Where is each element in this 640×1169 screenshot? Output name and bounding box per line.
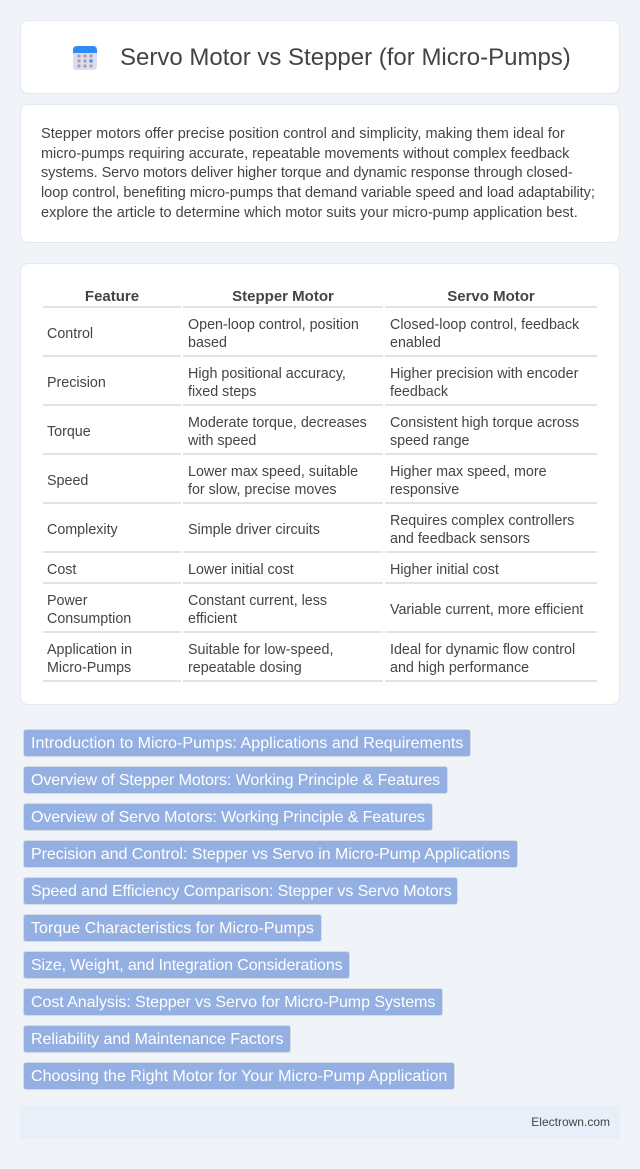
row: torque	[47, 415, 579, 449]
intro panel	[20, 104, 620, 243]
link 3: Overview of Servo Motors: Working Principle & Features	[31, 809, 425, 826]
row: application: and high performance	[390, 660, 529, 676]
link 9	[23, 1025, 291, 1053]
topic links list	[23, 729, 518, 1090]
row: application: Ideal for dynamic flow control	[390, 642, 575, 658]
row: control: Closed-loop control, feedback	[390, 317, 579, 333]
link 4	[23, 840, 518, 868]
row: power consumption: efficient	[188, 611, 237, 627]
footer bar	[20, 1105, 620, 1139]
row: cost: Lower initial cost	[188, 562, 294, 578]
row: power consumption: Constant current, less	[188, 593, 327, 609]
column headers	[85, 288, 535, 305]
intro text: micro-pumps requiring accurate, repeatable movements without complex feedback	[41, 146, 569, 162]
link 8	[23, 988, 443, 1016]
link 7	[23, 951, 350, 979]
column headers: Feature	[85, 288, 139, 305]
row: complexity: Simple driver circuits	[188, 522, 320, 538]
row: torque: with speed	[188, 433, 256, 449]
row: speed	[47, 464, 547, 498]
link 6	[23, 914, 322, 942]
intro text: explore the article to determine which motor suits your micro-pump application best.	[41, 205, 578, 221]
row: application: Micro-Pumps	[47, 660, 131, 676]
row: speed: responsive	[390, 482, 459, 498]
link 2	[23, 766, 448, 794]
row: speed: Higher max speed, more	[390, 464, 547, 480]
title: Servo Motor vs Stepper (for Micro-Pumps)	[120, 44, 571, 71]
row: power consumption: Power	[47, 593, 88, 609]
row: speed: for slow, precise moves	[188, 482, 337, 498]
row: torque: Moderate torque, decreases	[188, 415, 367, 431]
link 5: Speed and Efficiency Comparison: Stepper vs Servo Motors	[31, 883, 452, 900]
row: complexity: Requires complex controllers	[390, 513, 574, 529]
row: precision	[47, 366, 578, 400]
icon: calendar	[73, 46, 97, 70]
column headers: Stepper Motor	[232, 288, 334, 305]
row: precision: High positional accuracy,	[188, 366, 346, 382]
row: torque: speed range	[390, 433, 470, 449]
link 3	[23, 803, 433, 831]
comparison table panel	[20, 263, 620, 705]
link 5	[23, 877, 458, 905]
row: control: Open-loop control, position	[188, 317, 359, 333]
row: application	[47, 642, 575, 676]
link 4: Precision and Control: Stepper vs Servo in Micro-Pump Applications	[31, 846, 510, 863]
row: complexity: and feedback sensors	[390, 531, 530, 547]
link 7: Size, Weight, and Integration Considerations	[31, 957, 342, 974]
row: control: based	[188, 335, 227, 351]
row: power consumption: Consumption	[47, 611, 131, 627]
row: control: Control	[47, 326, 93, 342]
column headers: Servo Motor	[447, 288, 535, 305]
row: cost	[47, 562, 499, 578]
row: control	[47, 317, 580, 351]
row: cost: Cost	[47, 562, 76, 578]
row: precision: Higher precision with encoder	[390, 366, 578, 382]
row: control: enabled	[390, 335, 441, 351]
comparison table	[43, 288, 597, 682]
link 9: Reliability and Maintenance Factors	[31, 1031, 283, 1048]
link 10: Choosing the Right Motor for Your Micro-Pump Application	[31, 1068, 447, 1085]
row: cost: Higher initial cost	[390, 562, 499, 578]
row: application: Suitable for low-speed,	[188, 642, 333, 658]
row: torque: Torque	[47, 424, 91, 440]
link 1: Introduction to Micro-Pumps: Applications and Requirements	[31, 735, 463, 752]
row: complexity	[47, 513, 574, 547]
header panel	[20, 20, 620, 94]
row: precision: Precision	[47, 375, 106, 391]
row: precision: feedback	[390, 384, 448, 400]
link 8: Cost Analysis: Stepper vs Servo for Micro-Pump Systems	[31, 994, 435, 1011]
row: precision: fixed steps	[188, 384, 256, 400]
row: power consumption	[47, 593, 584, 627]
link 6: Torque Characteristics for Micro-Pumps	[31, 920, 314, 937]
row: speed: Speed	[47, 473, 88, 489]
row: speed: Lower max speed, suitable	[188, 464, 358, 480]
row: power consumption: Variable current, more efficient	[390, 602, 583, 618]
footer credit: Electrown.com	[531, 1115, 610, 1129]
intro text: loop control, benefiting micro-pumps that demand variable speed and load adaptability;	[41, 185, 595, 201]
intro text: Stepper motors offer precise position control and simplicity, making them ideal for	[41, 126, 565, 142]
row: complexity: Complexity	[47, 522, 118, 538]
row: application: Application in	[47, 642, 132, 658]
row: torque: Consistent high torque across	[390, 415, 579, 431]
link 10	[23, 1062, 455, 1090]
row: application: repeatable dosing	[188, 660, 302, 676]
intro text	[41, 126, 595, 221]
link 2: Overview of Stepper Motors: Working Principle & Features	[31, 772, 440, 789]
intro text: systems. Servo motors deliver higher torque and dynamic response through closed-	[41, 165, 573, 181]
link 1	[23, 729, 471, 757]
